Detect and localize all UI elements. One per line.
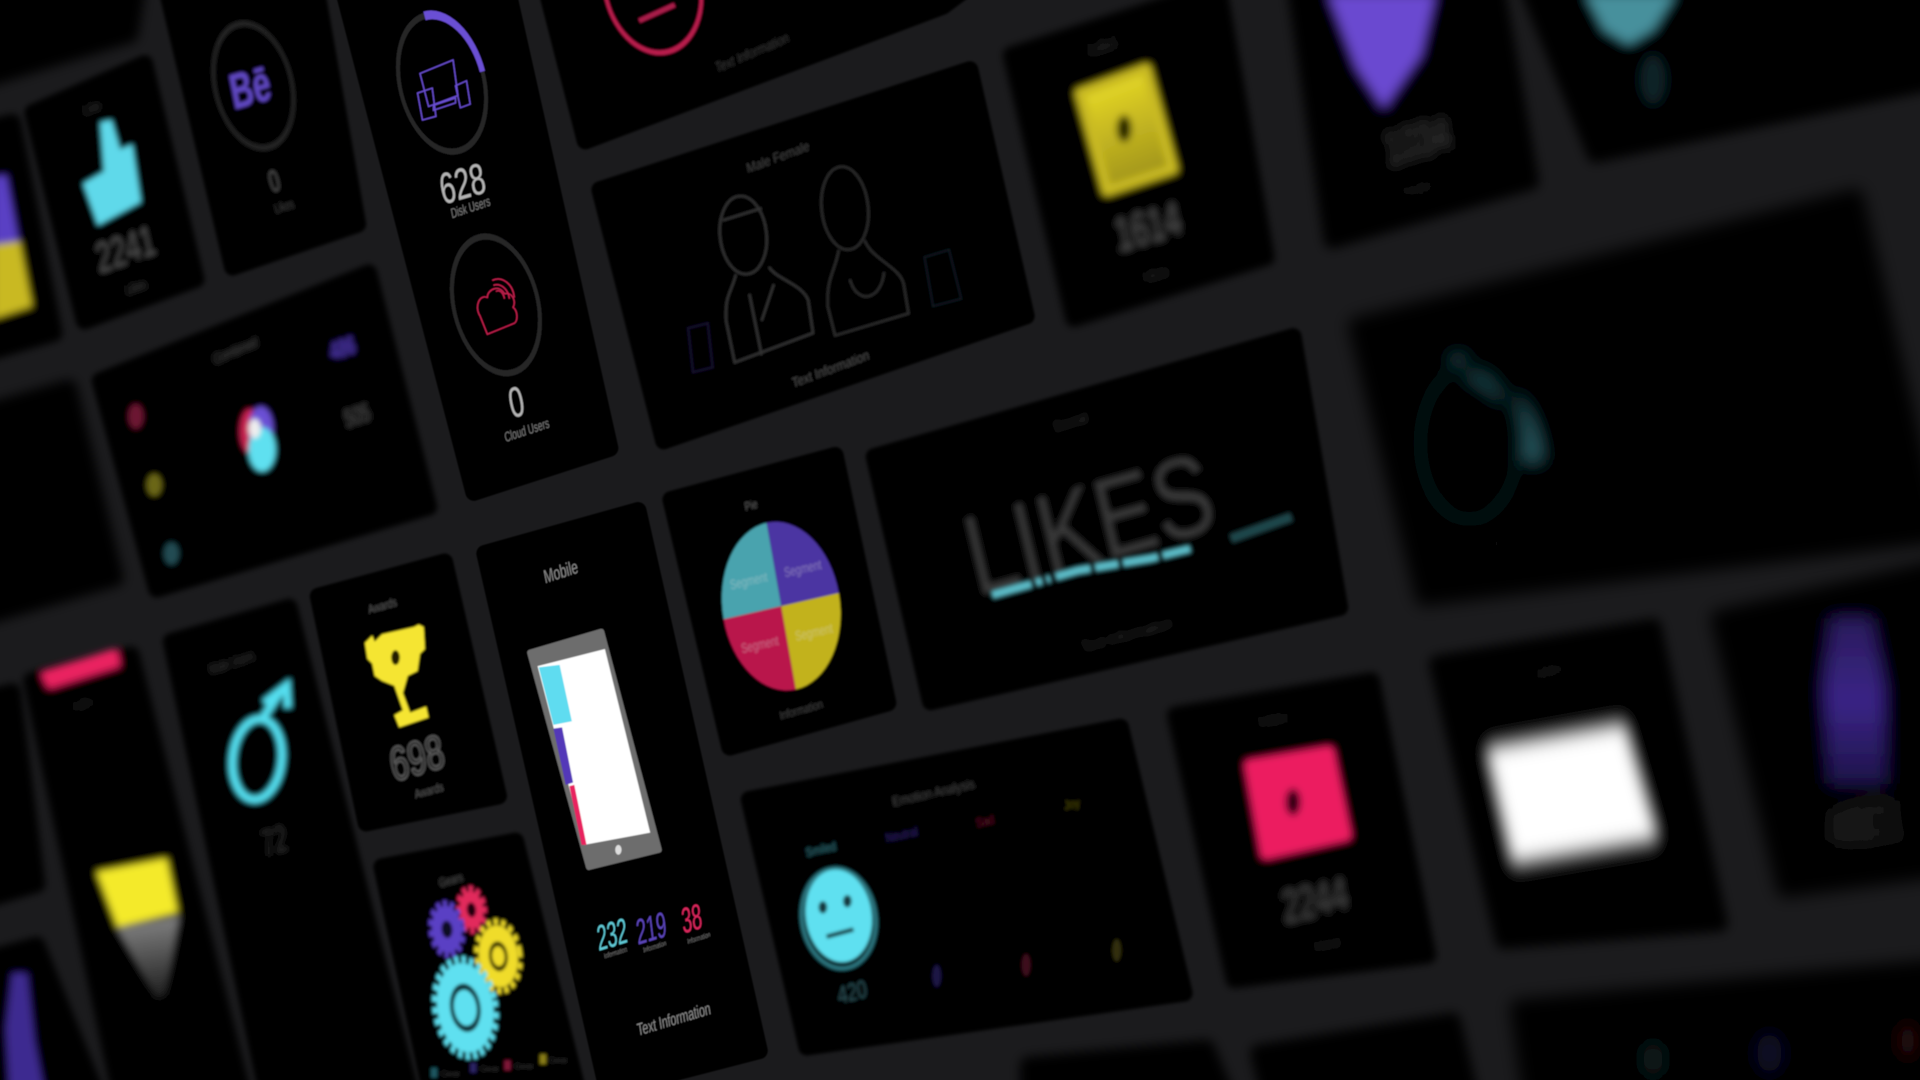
icon: behance logo: Bē	[225, 54, 275, 120]
panel: trophy	[318, 562, 498, 823]
icon: red gear	[455, 886, 488, 934]
mobile heading: Mobile	[542, 557, 580, 588]
panel: top-left empty	[0, 0, 137, 78]
legend purple: Neutral	[885, 825, 919, 846]
dim text	[1641, 55, 1665, 104]
trophy count: 698	[385, 724, 448, 792]
pie labels: Segment	[794, 621, 834, 644]
panel: combined	[100, 273, 429, 589]
pie labels	[729, 557, 834, 657]
icon: cloud with signal	[477, 279, 517, 334]
text information: Text Information	[636, 1000, 712, 1041]
trophy label: Awards	[414, 780, 445, 802]
dim red icon	[1022, 954, 1030, 976]
male title: Male Users	[208, 647, 256, 678]
legend smile: Smiled	[805, 840, 837, 860]
gauge: dim ring left	[1420, 367, 1518, 519]
disk users label: Disk Users	[450, 195, 492, 222]
panel: male	[171, 607, 410, 1080]
panel: bottom row 3	[1518, 967, 1920, 1080]
behance label: Likes	[273, 197, 296, 217]
marker yellow	[147, 474, 162, 496]
badge hole	[1117, 115, 1131, 142]
video count: 2244	[1279, 867, 1351, 934]
like count: 2241	[92, 216, 159, 283]
trophy hole	[391, 650, 400, 665]
icon: video badge	[1250, 752, 1346, 853]
panel: users outline	[600, 70, 1026, 441]
gear legend: Gear	[441, 1068, 460, 1078]
dim purple icon	[1757, 1033, 1782, 1073]
dim purple icon	[932, 965, 941, 987]
pie labels: Segment	[783, 557, 823, 581]
stat labels	[604, 931, 711, 961]
panel: thumbs up likes	[33, 64, 196, 321]
text information: Text Information	[1080, 615, 1174, 657]
marker red	[129, 404, 143, 429]
stat labels: Information	[687, 931, 711, 946]
trophy title: Awards	[367, 595, 399, 617]
venn blob	[240, 407, 276, 471]
cloud users label: Cloud Users	[503, 417, 551, 446]
white rectangle	[1487, 722, 1658, 864]
panel: behance	[167, 0, 358, 267]
count label: Views	[1143, 263, 1170, 286]
panel: bottom-left purple figure	[0, 945, 96, 1080]
pie labels: Segment	[740, 633, 780, 657]
video hole	[1286, 789, 1300, 816]
wave chart	[992, 517, 1292, 595]
gauge: red ring	[590, 0, 715, 64]
gauge: cloud users ring	[438, 226, 554, 384]
dim yellow icon	[1112, 939, 1121, 961]
panel: smile	[749, 727, 1184, 1047]
icon: purple gear	[427, 900, 467, 959]
dim red icon	[1900, 1024, 1915, 1058]
icon: pencil yellow	[97, 858, 178, 927]
pie caption: Information	[779, 698, 824, 723]
gear legend	[431, 1054, 568, 1078]
legend red: Sad	[975, 814, 995, 831]
panel: mobile	[485, 511, 759, 1080]
icon: yellow gear	[472, 917, 525, 996]
video label: Views	[1313, 932, 1343, 956]
dim icon: teal person	[924, 250, 961, 306]
like label: Likes	[125, 277, 148, 298]
panel: gauges	[1357, 197, 1920, 598]
stat purple: 486	[328, 331, 358, 366]
behance count: 0	[265, 164, 283, 199]
icon: male symbol	[229, 686, 288, 802]
stat labels: Information	[604, 945, 628, 961]
gears title: Gears	[438, 870, 465, 891]
pink badge	[45, 653, 116, 684]
panel: far-left lower	[0, 692, 37, 899]
icon: female person outline	[817, 164, 909, 336]
panel: pie chart	[671, 456, 888, 747]
stat purple: 219	[634, 905, 669, 954]
top label: Label	[1087, 33, 1118, 59]
panel: video	[1176, 681, 1428, 980]
top label: Label	[1532, 658, 1564, 684]
panel: bottom row 2	[1259, 1021, 1469, 1080]
count: 1034	[1380, 106, 1455, 177]
panel: left strip with purple and yellow icon	[0, 122, 54, 353]
stat red: 38	[679, 896, 704, 942]
panel title: Combined	[212, 334, 258, 368]
likes word: LIKES	[953, 428, 1226, 620]
gauge: disk users ring	[384, 4, 500, 162]
gauge ring	[201, 14, 306, 158]
stat cyan: 232	[595, 911, 629, 960]
minus bar	[639, 5, 675, 21]
panel: yellow badge	[1011, 0, 1266, 318]
gear legend: Gear	[549, 1055, 568, 1065]
pie labels: Segment	[729, 570, 769, 593]
top label: Video	[1257, 707, 1288, 732]
icon: purple bird	[1329, 0, 1435, 108]
icon: teal shape	[1586, 0, 1675, 44]
pie title: Pie	[744, 497, 759, 515]
icon: purple figure	[1824, 618, 1886, 784]
cloud users number: 0	[505, 377, 528, 428]
icon: purple and yellow shape	[0, 175, 32, 318]
panel: gears	[382, 841, 578, 1080]
dim teal icon	[1643, 1042, 1663, 1076]
icon: devices	[418, 60, 470, 120]
disk users number: 628	[435, 153, 489, 214]
count: 4821	[1825, 789, 1905, 858]
text information: Text Information	[714, 29, 790, 77]
panel: mid-left empty	[0, 388, 115, 616]
gauge: dim ring right	[1733, 285, 1831, 437]
panel: twitter	[1296, 0, 1531, 240]
panel: storage users	[343, 0, 610, 492]
panel: top-right	[1528, 0, 1920, 154]
icon: pencil tip	[118, 916, 179, 998]
gear legend: Gear	[480, 1063, 499, 1073]
icon: male person outline	[716, 194, 813, 362]
icon: trophy	[365, 624, 429, 727]
panel: likes	[874, 337, 1340, 702]
panel: pink label and pencil	[32, 653, 242, 1080]
count label: Tweets	[1401, 176, 1433, 201]
icon: thumb up	[83, 120, 141, 225]
text information: Text Information	[791, 347, 870, 391]
panel: right purple figure	[1719, 569, 1920, 889]
small label: Label	[72, 695, 93, 714]
stat white: 505	[342, 398, 372, 434]
panel: top red gauge	[546, 0, 967, 141]
face count: 420	[836, 975, 869, 1010]
panel: bottom row 1	[1029, 1048, 1224, 1080]
count: 1614	[1111, 192, 1185, 262]
panel: white box	[1438, 627, 1719, 940]
panel title: Social	[1052, 409, 1090, 437]
male count: 72	[258, 816, 291, 866]
icon: purple figure	[6, 973, 44, 1080]
icon: face	[795, 864, 882, 973]
legend yellow: Joy	[1063, 797, 1081, 813]
gear legend: Gear	[515, 1061, 534, 1071]
top label: Like	[82, 97, 102, 119]
panel heading: Emotion Analysis	[891, 776, 976, 810]
pie chart	[709, 510, 853, 702]
dim labels: Text	[1480, 524, 1517, 561]
dim icon: purple person	[688, 323, 713, 372]
icon: tablet with bars	[530, 632, 659, 867]
icon: cyan gear	[427, 953, 504, 1063]
marker teal	[164, 542, 179, 564]
panel title: Male Female	[745, 138, 811, 176]
gauge: teal arc	[1452, 364, 1533, 460]
icon: yellow badge	[1080, 69, 1173, 191]
gauge: dim ring middle	[1573, 328, 1671, 480]
stat labels: Information	[643, 939, 667, 955]
